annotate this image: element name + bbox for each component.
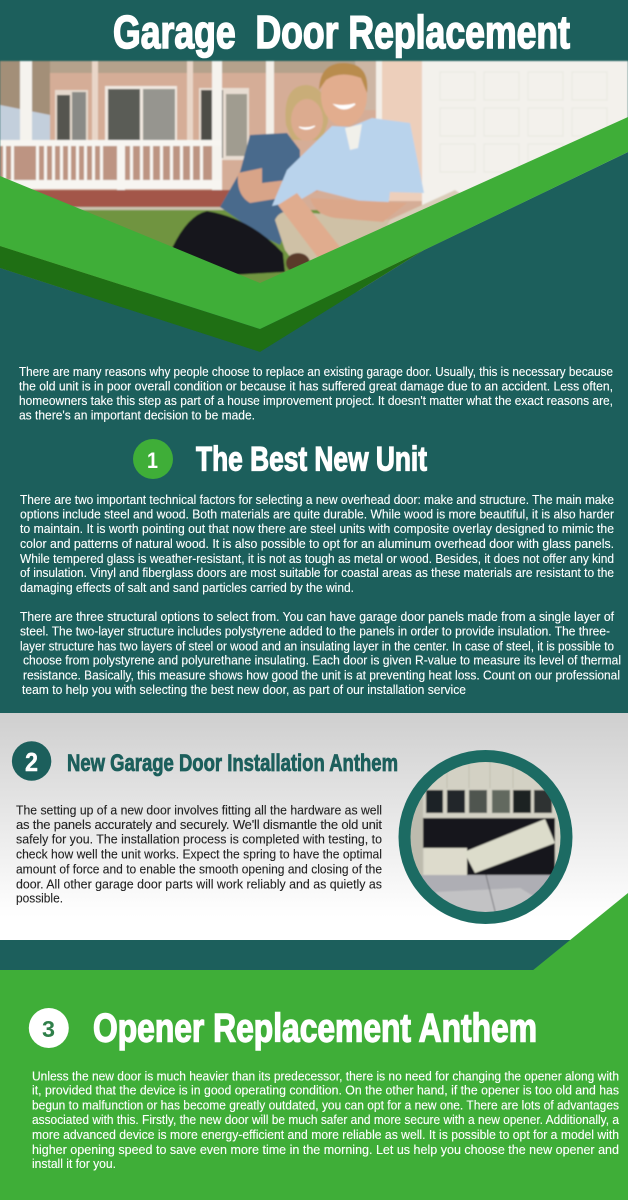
- section 2 paragraph: possible.: [16, 891, 63, 906]
- section 1 paragraph: structure: team to help you with selecting the best new door, as part of our installation service: [22, 682, 466, 697]
- teal lower-right fill: [0, 152, 628, 360]
- hero photo: couple in front of house: [0, 61, 628, 292]
- section 2 paragraph: amount of force and to enable the smooth opening and closing of the: [16, 862, 382, 877]
- section 3 badge: 3: [42, 1016, 55, 1042]
- woman: [220, 133, 300, 245]
- man: [275, 211, 390, 270]
- section 2 paragraph: safely for you. The installation process is completed with testing, to: [16, 832, 382, 847]
- teal band: [0, 940, 628, 970]
- section 3 badge: [29, 1008, 69, 1048]
- chevron shadow: [0, 246, 424, 352]
- section 1 paragraph: structure: [20, 609, 621, 697]
- section 2 paragraph: The setting up of a new door involves fitting all the hardware as well: [16, 803, 382, 818]
- section 1 heading: The Best New Unit: [196, 440, 427, 478]
- section 2 badge: 2: [25, 747, 38, 777]
- section 2 paragraph: [16, 803, 382, 906]
- section 2 heading: New Garage Door Installation Anthem: [67, 750, 398, 777]
- chevron: [0, 117, 628, 329]
- panel: section 3 background: [0, 970, 628, 1200]
- section 1 badge: 1: [147, 448, 158, 473]
- section 1 badge: [133, 439, 173, 479]
- section 3 paragraph: install it for you.: [32, 1156, 116, 1171]
- circular photo: damaged garage door: [398, 750, 572, 924]
- section 1 paragraph: materials: [20, 492, 615, 595]
- section 2 paragraph: as the panels accurately and securely. We'll dismantle the old unit: [16, 817, 382, 832]
- intro text: as there's an important decision to be made.: [19, 408, 255, 422]
- section 2 paragraph: check how well the unit works. Expect the spring to have the optimal: [16, 847, 382, 862]
- section 3 paragraph: [32, 1069, 620, 1171]
- section 2 paragraph: door. All other garage door parts will work reliably and as quietly as: [16, 876, 382, 891]
- panel: section 2 background: [0, 713, 628, 940]
- section 2 badge: [12, 741, 51, 781]
- green corner triangle: [532, 893, 628, 971]
- section 1 paragraph: materials: damaging effects of salt and sand particles carried by the wind.: [20, 580, 354, 595]
- intro text: [19, 364, 613, 422]
- section 3 paragraph: higher opening speed to save even more time in the morning. Let us help you choose the new opener and: [32, 1142, 619, 1157]
